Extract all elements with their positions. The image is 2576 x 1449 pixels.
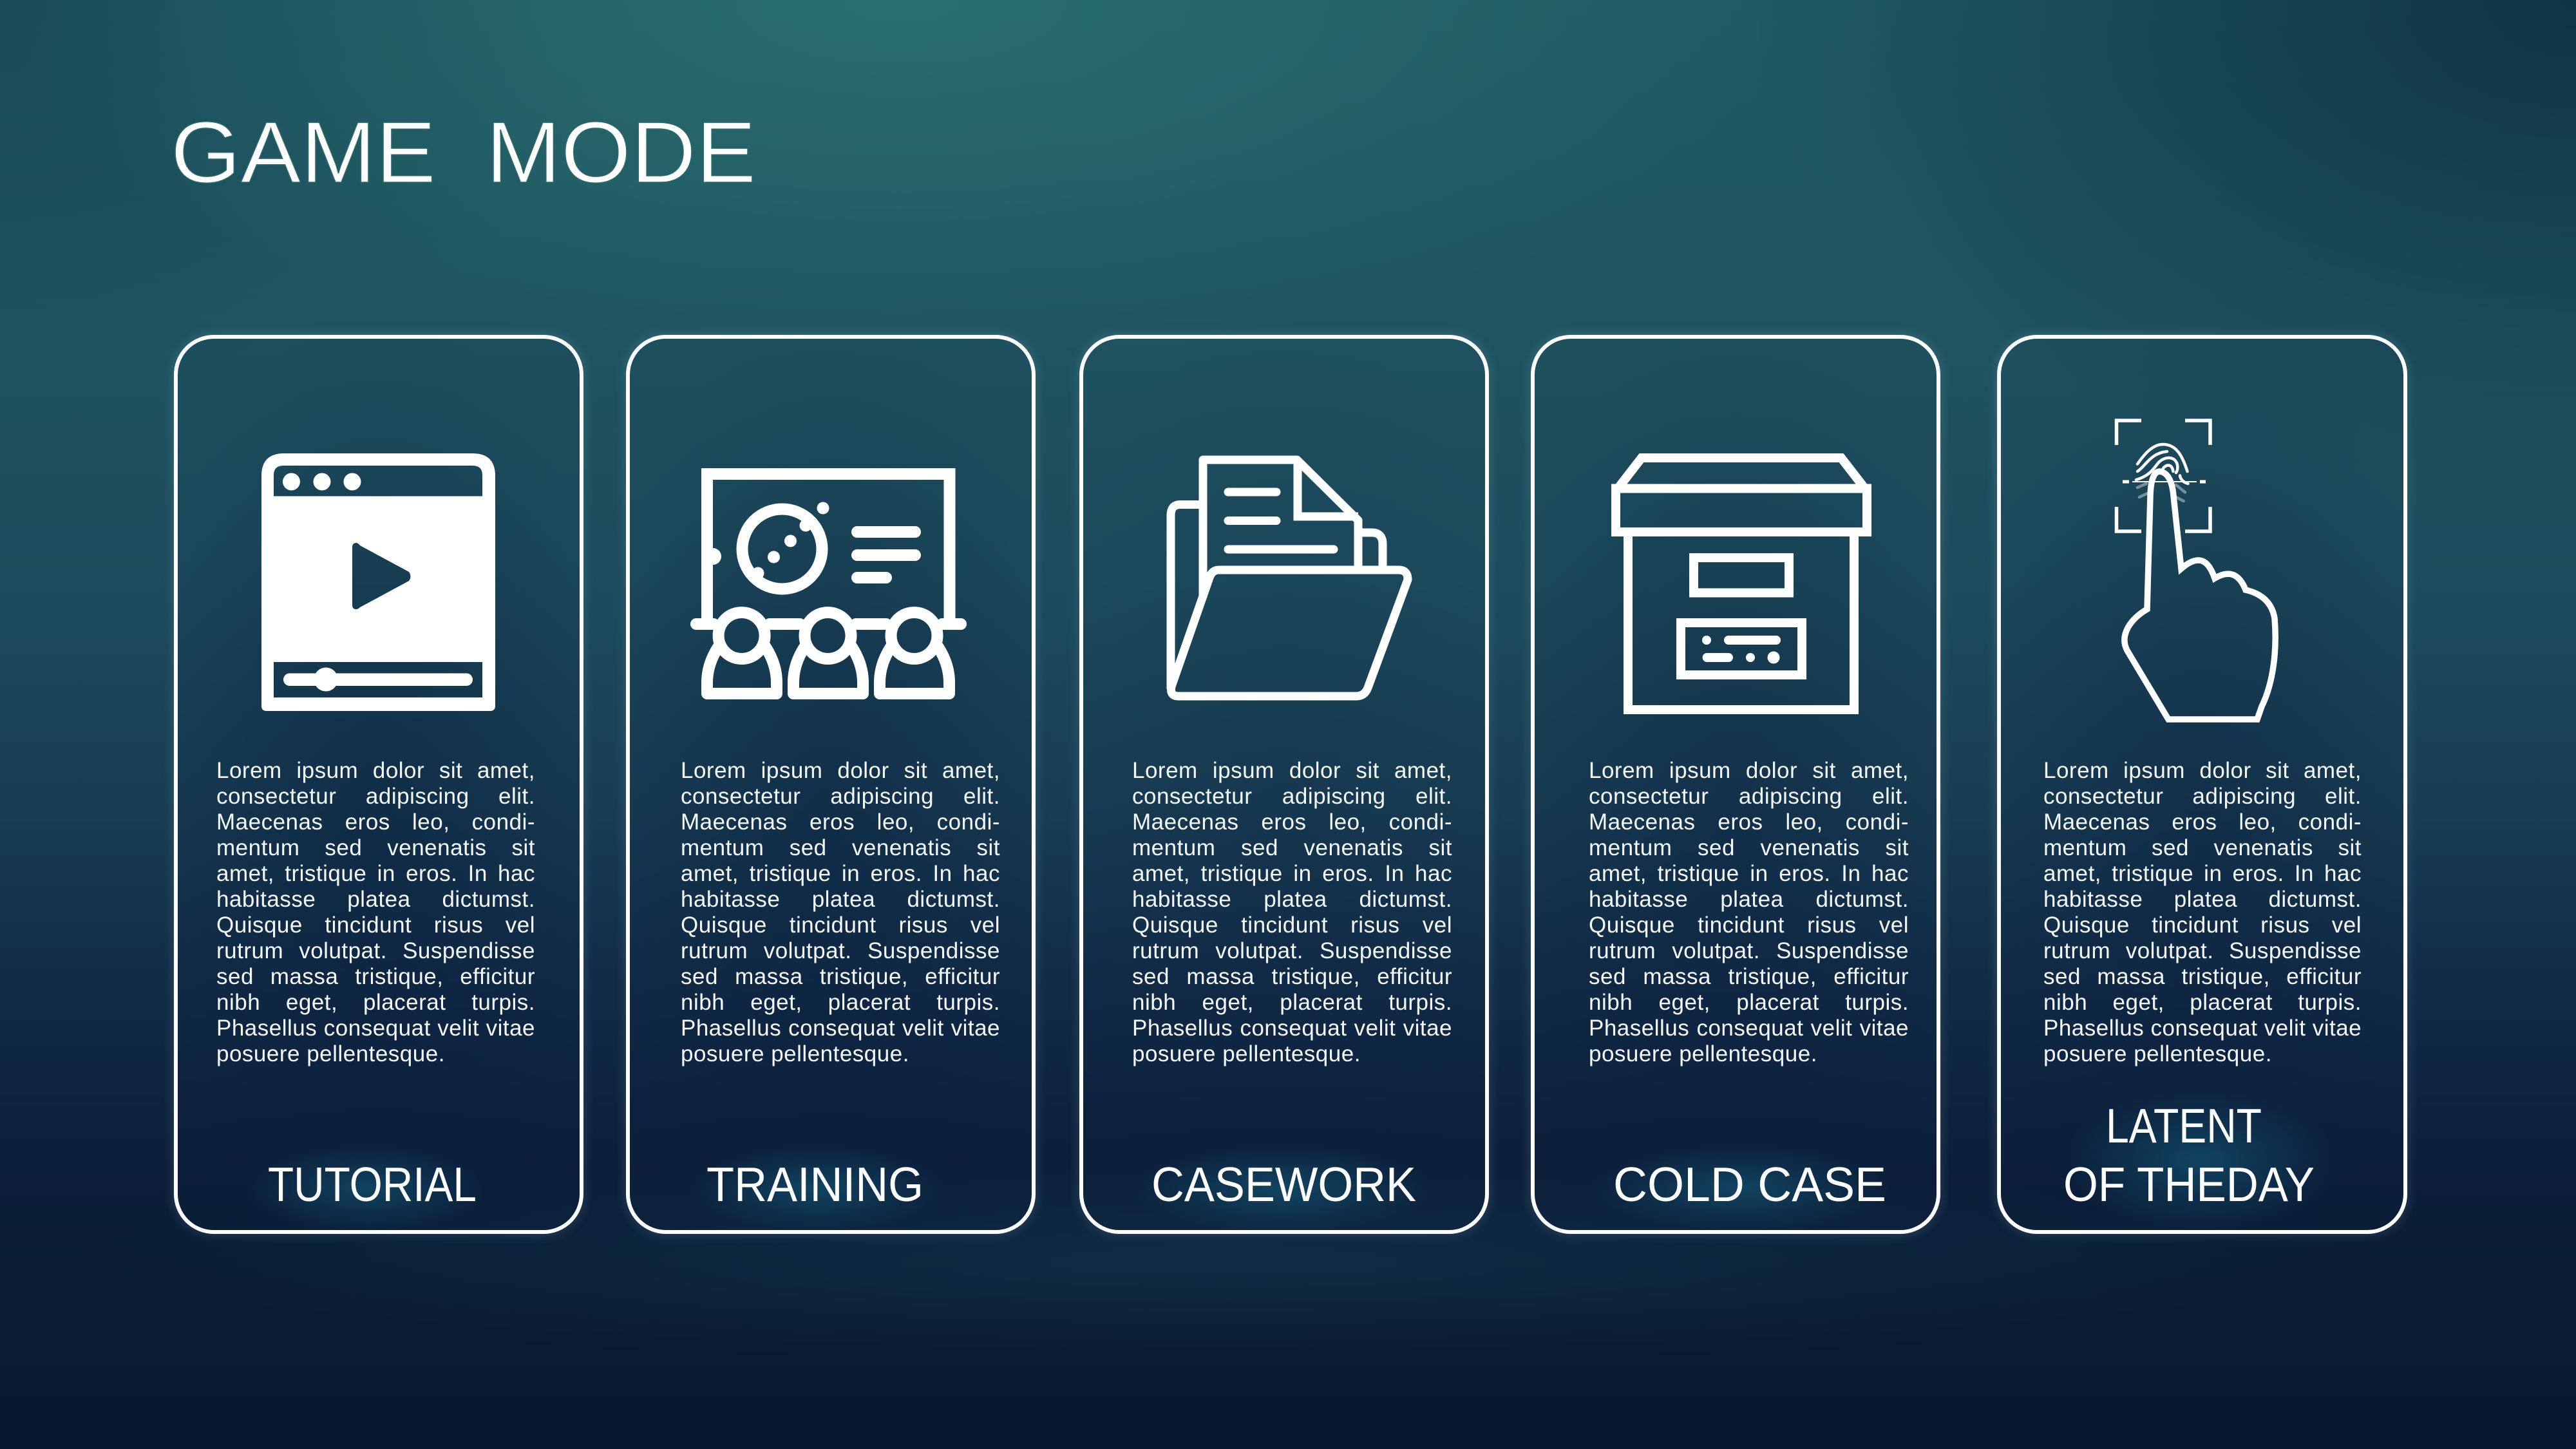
body text: latent of the day: habitasse platea dictumst. xyxy=(2043,887,2362,912)
label: latent of the day: OF THEDAY xyxy=(2063,1157,2315,1211)
body text: tutorial: sed massa tristique, efficitur xyxy=(216,964,535,989)
body text: tutorial xyxy=(216,758,535,1066)
body text: training: amet, tristique in eros. In hac xyxy=(681,861,1000,886)
body text: tutorial: Lorem ipsum dolor sit amet, xyxy=(216,758,535,783)
body text: latent of the day: posuere pellentesque. xyxy=(2043,1041,2272,1066)
body text: latent of the day: Lorem ipsum dolor sit amet, xyxy=(2043,758,2362,783)
body text: tutorial: nibh eget, placerat turpis. xyxy=(216,990,535,1015)
body text: casework: Maecenas eros leo, condi- xyxy=(1132,810,1452,835)
body text: casework: Lorem ipsum dolor sit amet, xyxy=(1132,758,1452,783)
panel: tutorial xyxy=(170,332,587,1238)
body text: casework: nibh eget, placerat turpis. xyxy=(1132,990,1452,1015)
body text: cold case: nibh eget, placerat turpis. xyxy=(1589,990,1909,1015)
panel: training xyxy=(622,332,1039,1238)
body text: training xyxy=(681,758,1000,1066)
body text: cold case: mentum sed venenatis sit xyxy=(1589,835,1909,860)
body text: training: consectetur adipiscing elit. xyxy=(681,784,1000,809)
label: latent of the day: LATENT xyxy=(2106,1099,2262,1153)
body text: latent of the day: nibh eget, placerat turpis. xyxy=(2043,990,2362,1015)
icon: open folder with document xyxy=(1167,456,1412,701)
body text: cold case: amet, tristique in eros. In hac xyxy=(1589,861,1909,886)
body text: latent of the day: sed massa tristique, efficitur xyxy=(2043,964,2362,989)
body text: latent of the day: Phasellus consequat velit vitae xyxy=(2043,1016,2362,1041)
body text: casework: sed massa tristique, efficitur xyxy=(1132,964,1452,989)
body text: casework: consectetur adipiscing elit. xyxy=(1132,784,1452,809)
body text: training: posuere pellentesque. xyxy=(681,1041,909,1066)
body text: tutorial: Quisque tincidunt risus vel xyxy=(216,913,535,938)
body text: casework: rutrum volutpat. Suspendisse xyxy=(1132,938,1452,963)
body text: latent of the day: Maecenas eros leo, condi- xyxy=(2043,810,2362,835)
body text: casework: habitasse platea dictumst. xyxy=(1132,887,1452,912)
body text: cold case xyxy=(1589,758,1909,1066)
label: cold case: COLD CASE xyxy=(1613,1157,1886,1211)
body text: latent of the day: mentum sed venenatis sit xyxy=(2043,835,2362,860)
body text: cold case: rutrum volutpat. Suspendisse xyxy=(1589,938,1909,963)
body text: cold case: habitasse platea dictumst. xyxy=(1589,887,1909,912)
body text: casework: Quisque tincidunt risus vel xyxy=(1132,913,1452,938)
label glow: casework xyxy=(1131,1143,1434,1233)
icon: finger on fingerprint scanner xyxy=(2115,419,2278,723)
label: training: TRAINING xyxy=(706,1157,923,1211)
card frame: tutorial xyxy=(174,335,583,1234)
label glow: training xyxy=(687,1143,945,1233)
body text: tutorial: Phasellus consequat velit vitae xyxy=(216,1016,535,1041)
body text: tutorial: consectetur adipiscing elit. xyxy=(216,784,535,809)
body text: latent of the day: amet, tristique in eros. In hac xyxy=(2043,861,2362,886)
body text: latent of the day: Quisque tincidunt risus vel xyxy=(2043,913,2362,938)
body text: training: nibh eget, placerat turpis. xyxy=(681,990,1000,1015)
body text: training: Quisque tincidunt risus vel xyxy=(681,913,1000,938)
label: casework: CASEWORK xyxy=(1151,1157,1416,1211)
card frame: training xyxy=(626,335,1036,1234)
body text: cold case: consectetur adipiscing elit. xyxy=(1589,784,1909,809)
body text: training: mentum sed venenatis sit xyxy=(681,835,1000,860)
body text: tutorial: rutrum volutpat. Suspendisse xyxy=(216,938,535,963)
body text: cold case: sed massa tristique, efficitur xyxy=(1589,964,1909,989)
body text: latent of the day: rutrum volutpat. Suspendisse xyxy=(2043,938,2362,963)
body text: cold case: Quisque tincidunt risus vel xyxy=(1589,913,1909,938)
body text: tutorial: mentum sed venenatis sit xyxy=(216,835,535,860)
body text: latent of the day: consectetur adipiscing elit. xyxy=(2043,784,2362,809)
body text: training: habitasse platea dictumst. xyxy=(681,887,1000,912)
label glow: cold case xyxy=(1589,1143,1891,1233)
body text: casework: mentum sed venenatis sit xyxy=(1132,835,1452,860)
body text: tutorial: posuere pellentesque. xyxy=(216,1041,445,1066)
panel: cold case xyxy=(1527,332,1944,1238)
body text: casework: Phasellus consequat velit vitae xyxy=(1132,1016,1452,1041)
body text: cold case: Maecenas eros leo, condi- xyxy=(1589,810,1909,835)
body text: casework: amet, tristique in eros. In hac xyxy=(1132,861,1452,886)
label: tutorial: TUTORIAL xyxy=(268,1157,477,1211)
label glow: tutorial xyxy=(245,1143,489,1233)
panel: casework xyxy=(1075,332,1493,1238)
body text: tutorial: Maecenas eros leo, condi- xyxy=(216,810,535,835)
body text: tutorial: habitasse platea dictumst. xyxy=(216,887,535,912)
card frame: cold case xyxy=(1531,335,1940,1234)
icon: archive box xyxy=(1611,453,1871,714)
panel: latent of the day xyxy=(1993,332,2411,1238)
icon: presentation with audience xyxy=(690,468,967,699)
body text: latent of the day xyxy=(2043,758,2362,1066)
body text: training: rutrum volutpat. Suspendisse xyxy=(681,938,1000,963)
body text: cold case: Phasellus consequat velit vitae xyxy=(1589,1016,1909,1041)
card frame: casework xyxy=(1079,335,1489,1234)
body text: training: Phasellus consequat velit vitae xyxy=(681,1016,1000,1041)
body text: cold case: Lorem ipsum dolor sit amet, xyxy=(1589,758,1909,783)
body text: training: Maecenas eros leo, condi- xyxy=(681,810,1000,835)
label glow: latent of the day xyxy=(2061,1088,2338,1233)
body text: casework xyxy=(1132,758,1452,1066)
body text: training: Lorem ipsum dolor sit amet, xyxy=(681,758,1000,783)
body text: cold case: posuere pellentesque. xyxy=(1589,1041,1817,1066)
icon: video player xyxy=(261,453,495,711)
body text: tutorial: amet, tristique in eros. In hac xyxy=(216,861,535,886)
label: latent of the day xyxy=(1997,1088,2407,1224)
title: GAME MODE xyxy=(171,104,756,201)
body text: training: sed massa tristique, efficitur xyxy=(681,964,1000,989)
card frame: latent of the day xyxy=(1997,335,2407,1234)
body text: casework: posuere pellentesque. xyxy=(1132,1041,1361,1066)
